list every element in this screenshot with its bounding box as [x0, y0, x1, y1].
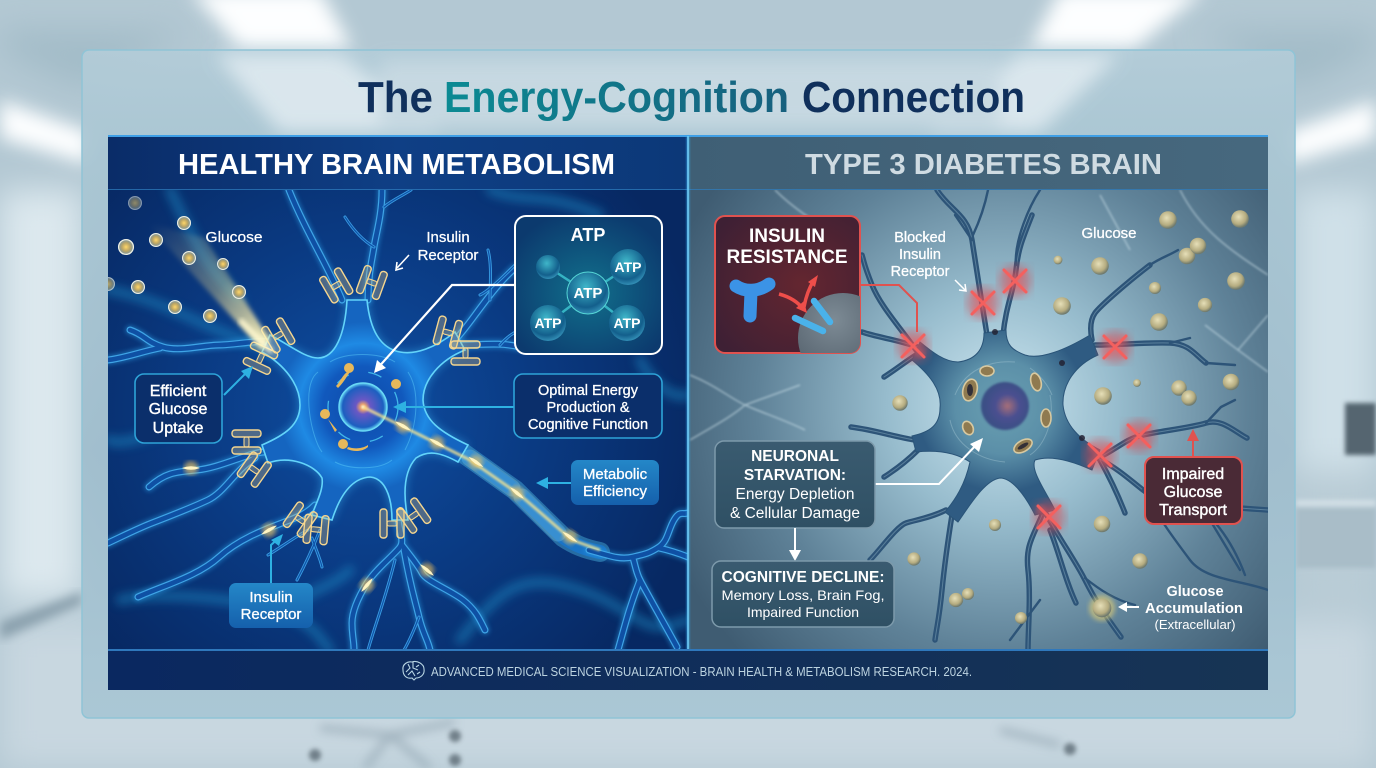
callout: efficient glucose uptake: Efficient: [150, 383, 207, 400]
label: glucose accumulation: (Extracellular): [1154, 618, 1236, 632]
callout: neuronal starvation: & Cellular Damage: [730, 505, 860, 522]
callout: metabolic efficiency: Metabolic: [583, 466, 648, 483]
callout: insulin resistance: RESISTANCE: [726, 247, 848, 268]
footer bar: ADVANCED MEDICAL SCIENCE VISUALIZATION - BRAIN HEALTH & METABOLISM RESEARCH. 2024.: [431, 664, 972, 679]
box: ATP: [374, 216, 662, 373]
ATP molecule: [530, 249, 646, 341]
callout: impaired glucose transport: Glucose: [1164, 484, 1222, 501]
dendrites: damaged: [851, 190, 1268, 650]
blocked receptor marks: [897, 265, 1155, 533]
nucleus: damaged: [981, 382, 1029, 430]
label: blocked insulin receptor: Blocked: [894, 230, 946, 246]
ATP molecule: ATP: [574, 285, 602, 302]
soma: damaged: [912, 330, 1100, 522]
heading band: healthy: HEALTHY BRAIN METABOLISM: [178, 149, 615, 181]
callout: efficient glucose uptake: [135, 366, 253, 443]
label: insulin receptor top: Receptor: [418, 247, 478, 264]
arrow: starvation to decline: [789, 528, 801, 561]
neuron illustration: healthy: [102, 190, 688, 650]
panel: type 3 diabetes brain: [688, 136, 1268, 650]
callout: optimal energy production: Optimal Energy: [538, 383, 639, 399]
heading band: type 3: [688, 136, 1268, 190]
callout: insulin receptor bottom: [229, 534, 313, 628]
callout: impaired glucose transport: Transport: [1159, 502, 1227, 519]
heading band: type 3: TYPE 3 DIABETES BRAIN: [805, 149, 1162, 181]
glass frame panel: [82, 50, 1295, 718]
title: The: [358, 73, 433, 122]
label: blocked insulin receptor: Insulin: [899, 247, 941, 263]
icon: red deflected arrow: [779, 280, 814, 309]
damaged mitochondria: [960, 366, 1051, 456]
callout: insulin resistance: [714, 215, 918, 354]
label: glucose accumulation: [1118, 583, 1243, 632]
ATP molecule: ATP: [614, 315, 640, 331]
title: [358, 73, 1025, 122]
label: insulin receptor top: [396, 229, 478, 270]
title: Connection: [802, 73, 1025, 122]
callout: insulin resistance: INSULIN: [749, 226, 825, 247]
callout: neuronal starvation: [715, 438, 983, 528]
label: glucose: Glucose: [206, 229, 262, 246]
footer bar: [108, 649, 1268, 690]
nucleus: [328, 372, 398, 442]
ATP molecule: ATP: [535, 315, 561, 331]
axon: [459, 445, 610, 562]
soma: healthy: [262, 300, 468, 520]
callout: efficient glucose uptake: Uptake: [153, 420, 203, 437]
ATP molecule: ATP: [615, 259, 641, 275]
insulin receptors: [232, 265, 480, 545]
icon: insulin molecule: [736, 284, 769, 316]
extracellular glucose: [892, 210, 1249, 624]
dendrites: [108, 190, 688, 650]
mitochondria: [320, 363, 401, 451]
label: blocked insulin receptor: Receptor: [891, 264, 950, 280]
callout: neuronal starvation: Energy Depletion: [736, 486, 854, 503]
callout: optimal energy production: Production &: [546, 400, 630, 416]
callout: metabolic efficiency: [536, 460, 659, 505]
soma glow: [262, 300, 468, 520]
label: glucose right: Glucose: [1081, 225, 1137, 242]
callout: cognitive decline: COGNITIVE DECLINE:: [722, 569, 884, 586]
icon: brain: [403, 661, 424, 680]
heading band: healthy: [108, 136, 688, 190]
label: glucose accumulation: Accumulation: [1145, 600, 1243, 617]
axon sparks: [182, 407, 600, 596]
callout: optimal energy production: Cognitive Function: [528, 417, 648, 433]
callout: optimal energy production: [393, 374, 662, 438]
callout: neuronal starvation: NEURONAL: [751, 448, 839, 465]
callout: impaired glucose transport: Impaired: [1162, 466, 1224, 483]
callout: cognitive decline: Memory Loss, Brain Fog,: [722, 587, 884, 603]
title: Energy-Cognition: [444, 73, 789, 122]
glucose stream: [102, 196, 272, 352]
callout: cognitive decline: [712, 561, 894, 627]
glowing panel edges: [108, 135, 1268, 650]
icon: receptor: [795, 301, 830, 331]
callout: cognitive decline: Impaired Function: [747, 604, 859, 620]
label: insulin receptor top: Insulin: [426, 229, 470, 246]
neuron illustration: damaged: [690, 190, 1268, 650]
box: ATP: ATP: [571, 225, 605, 245]
label: blocked insulin receptor: [891, 230, 966, 291]
callout: neuronal starvation: STARVATION:: [744, 467, 846, 484]
callout: insulin receptor bottom: Receptor: [241, 606, 301, 623]
callout: insulin receptor bottom: Insulin: [249, 589, 293, 606]
panel: healthy brain metabolism: [102, 136, 688, 650]
callout: impaired glucose transport: [1145, 429, 1242, 524]
callout: metabolic efficiency: Efficiency: [583, 483, 647, 500]
label: glucose accumulation: Glucose: [1166, 583, 1224, 600]
callout: efficient glucose uptake: Glucose: [149, 401, 207, 418]
